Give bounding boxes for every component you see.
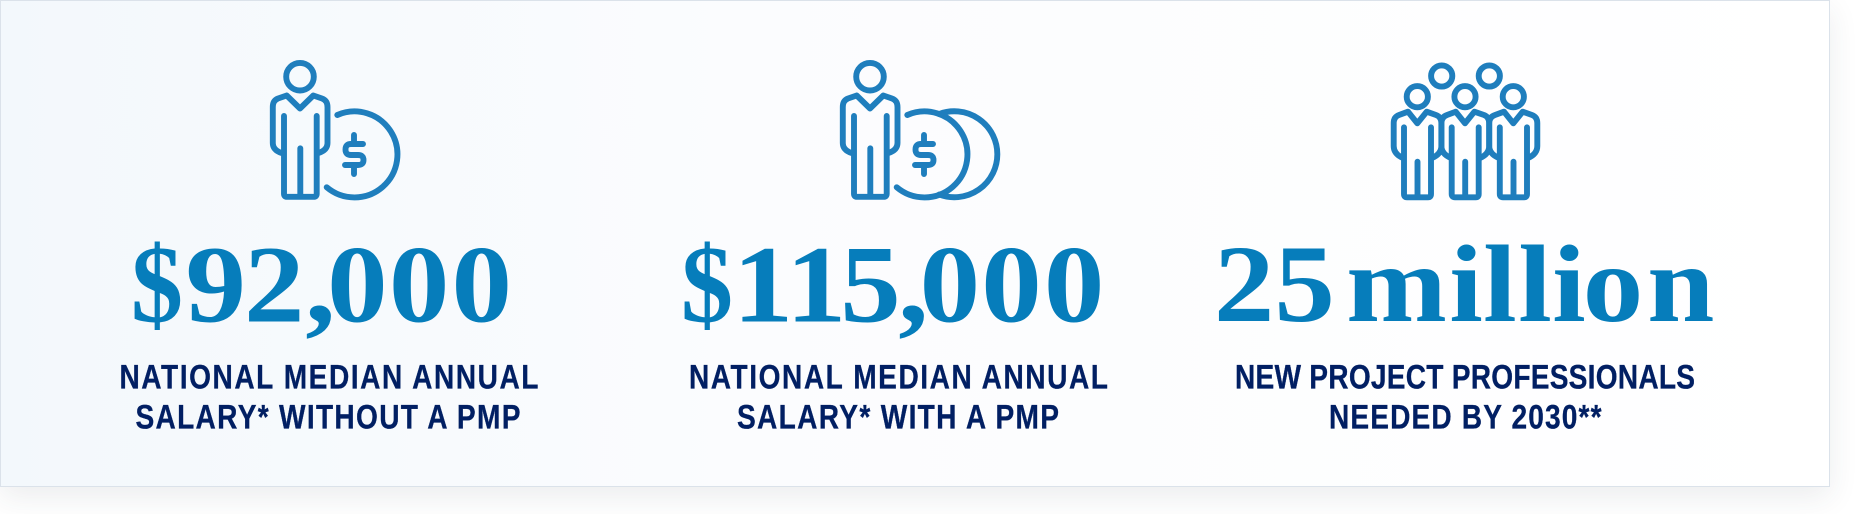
- column: salary without PMP: [119, 63, 538, 436]
- label: new project professionals needed by 2030: NEEDED BY 2030**: [1329, 398, 1602, 436]
- label: national median annual salary with a PMP: [689, 358, 1108, 436]
- stat: $115,000: $: [681, 224, 733, 346]
- label: national median annual salary with a PMP: SALARY* WITH A PMP: [737, 398, 1059, 436]
- stat: $92,000: 92,000: [186, 224, 512, 346]
- icon: person with one coin: [273, 63, 397, 197]
- label: national median annual salary without a PMP: [119, 358, 538, 436]
- label: new project professionals needed by 2030: [1235, 358, 1695, 436]
- label: national median annual salary with a PMP: NATIONAL MEDIAN ANNUAL: [689, 358, 1108, 396]
- column: new project professionals: [1214, 65, 1714, 436]
- icon: group of five people: [1394, 65, 1537, 197]
- stat: $92,000: $: [131, 224, 183, 346]
- icon: person with two coins: [843, 63, 997, 197]
- column: salary with PMP: [681, 63, 1108, 436]
- stat: $115,000: 115,000: [733, 224, 1104, 346]
- label: new project professionals needed by 2030: NEW PROJECT PROFESSIONALS: [1235, 358, 1695, 396]
- label: national median annual salary without a PMP: NATIONAL MEDIAN ANNUAL: [119, 358, 538, 396]
- stat: 25 million: 25 million: [1214, 224, 1714, 346]
- label: national median annual salary without a PMP: SALARY* WITHOUT A PMP: [135, 398, 520, 436]
